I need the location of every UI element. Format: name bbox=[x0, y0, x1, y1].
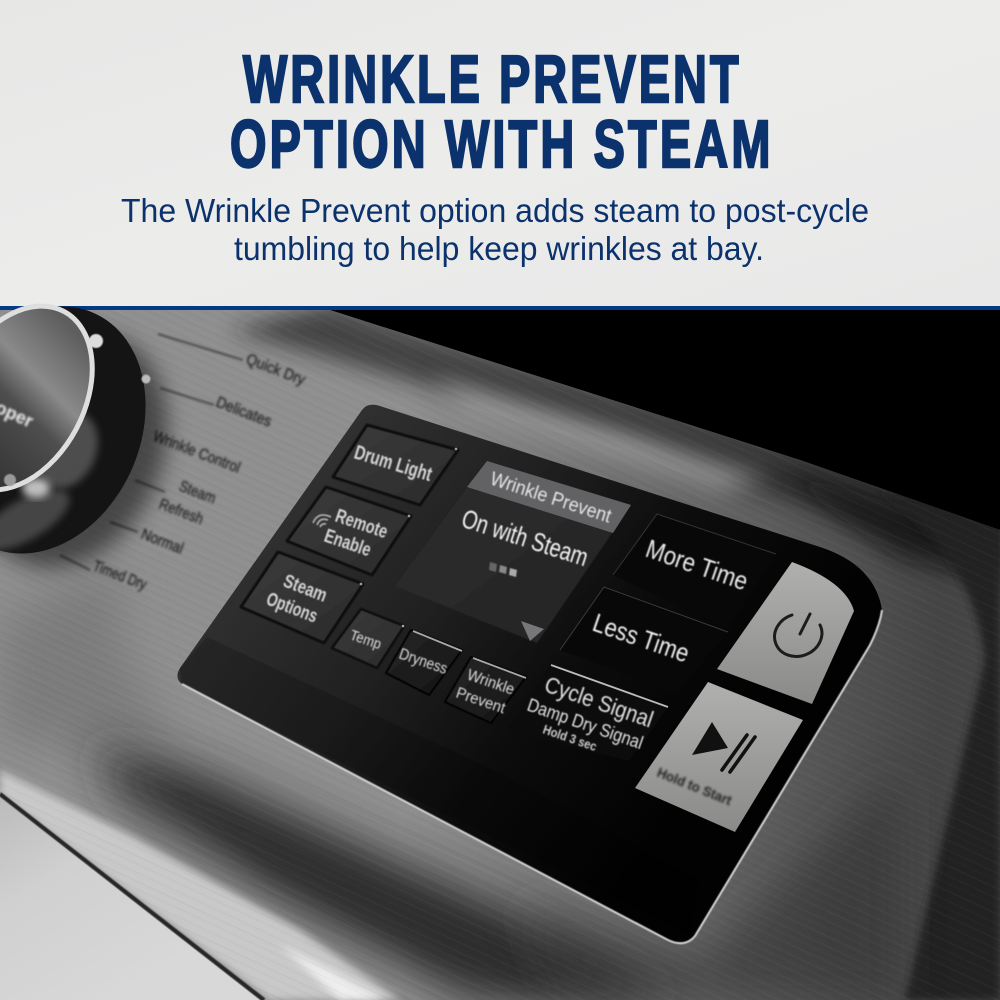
control panel bbox=[177, 405, 882, 943]
button: Temp bbox=[332, 609, 404, 668]
button: Remote Enable: Enable bbox=[321, 526, 374, 561]
button: More Time bbox=[613, 514, 776, 629]
button: Temp: Temp bbox=[348, 627, 383, 653]
cycle labels bbox=[60, 334, 308, 594]
button: Remote Enable bbox=[287, 487, 411, 575]
button: start bbox=[635, 682, 803, 832]
button: Cycle Signal bbox=[507, 664, 668, 761]
cycle labels: Normal bbox=[139, 526, 186, 558]
button: Steam Options: Steam bbox=[280, 571, 330, 607]
button: Dryness bbox=[386, 630, 462, 695]
button: Wrinkle Prevent: Prevent bbox=[454, 685, 508, 718]
subtitle: The Wrinkle Prevent option adds steam to post-cycle bbox=[121, 192, 869, 229]
display screen bbox=[395, 461, 631, 643]
title bbox=[230, 43, 770, 182]
button: Wrinkle Prevent: Wrinkle bbox=[465, 667, 517, 699]
cycle labels: Steam bbox=[177, 478, 218, 507]
cycle labels: Delicates bbox=[214, 394, 274, 431]
button: Cycle Signal: Cycle Signal bbox=[541, 671, 657, 733]
button: Less Time: Less Time bbox=[589, 607, 693, 668]
cycle labels: Quick Dry bbox=[244, 351, 308, 389]
button: start: Hold to Start bbox=[655, 764, 734, 808]
button: Dryness: Dryness bbox=[397, 646, 450, 678]
icon: play pause bbox=[692, 722, 755, 772]
button: Drum Light: Drum Light bbox=[352, 442, 435, 486]
brushed metal body bbox=[0, 305, 1000, 1000]
cycle labels: Refresh bbox=[157, 496, 206, 528]
dial knob bbox=[0, 273, 204, 599]
display screen: On with Steam bbox=[458, 503, 592, 572]
title: OPTION WITH STEAM bbox=[230, 108, 770, 182]
button: More Time: More Time bbox=[642, 533, 752, 596]
blue divider rule bbox=[0, 306, 1000, 310]
button: Steam Options: Options bbox=[263, 589, 320, 628]
button: Steam Options bbox=[241, 552, 363, 643]
button: Remote Enable: Remote bbox=[332, 506, 390, 543]
white lower lid bbox=[0, 797, 260, 1000]
screen header bar bbox=[467, 461, 631, 533]
button: Drum Light bbox=[333, 425, 458, 505]
display screen: Wrinkle Prevent bbox=[487, 468, 615, 528]
cycle labels: Timed Dry bbox=[91, 558, 149, 594]
button: power bbox=[717, 562, 854, 704]
button: Cycle Signal: Hold 3 sec bbox=[541, 723, 599, 754]
subtitle bbox=[121, 192, 869, 267]
panel rim highlight bbox=[182, 610, 882, 943]
cycle labels: Wrinkle Control bbox=[151, 428, 243, 477]
icon: power bbox=[775, 614, 822, 656]
button: Wrinkle Prevent bbox=[445, 657, 526, 723]
subtitle: tumbling to help keep wrinkles at bay. bbox=[234, 230, 764, 267]
photo: washer control panel bbox=[0, 273, 1000, 1000]
button: Cycle Signal: Damp Dry Signal bbox=[525, 695, 646, 753]
icon: wifi bbox=[313, 515, 331, 527]
title: WRINKLE PREVENT bbox=[243, 43, 739, 117]
button: Less Time bbox=[560, 587, 728, 693]
header background bbox=[0, 0, 1000, 306]
